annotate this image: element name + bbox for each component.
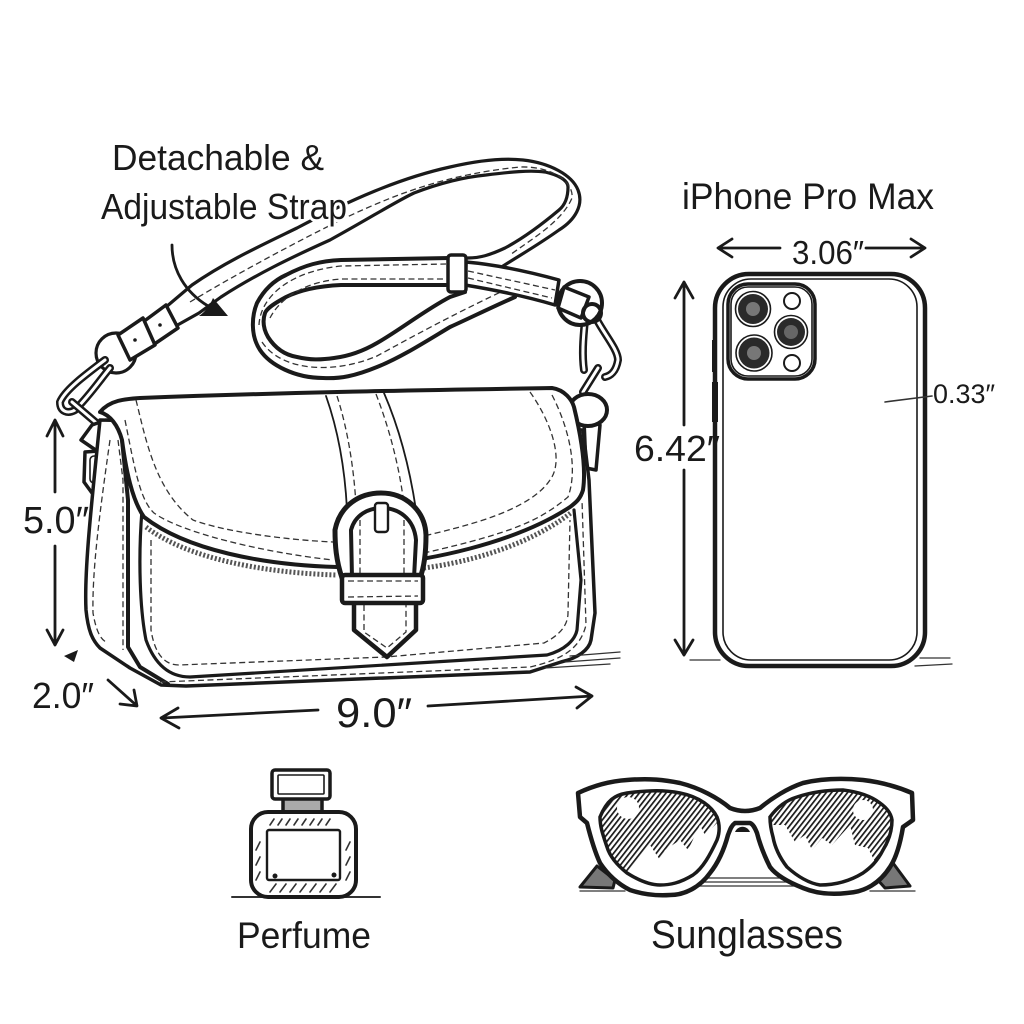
- perfume bottle icon: [232, 770, 380, 897]
- bag depth dimension: [32, 650, 137, 716]
- strap arrow: [172, 245, 228, 316]
- bag width dimension: [161, 687, 592, 736]
- left chain hardware: [60, 333, 136, 493]
- bag width dimension: 9.0″: [336, 689, 412, 736]
- bag depth dimension: 2.0″: [32, 675, 94, 716]
- flap centre strap: [326, 393, 416, 510]
- infographic canvas: [24, 144, 994, 956]
- right strap ring tab: [558, 287, 589, 318]
- bag flap: [100, 388, 584, 567]
- bag height dimension: 5.0″: [23, 500, 89, 542]
- strap: [118, 159, 601, 378]
- phone depth dimension: 0.33″: [933, 379, 995, 409]
- strap label: Adjustable Strap: [101, 186, 347, 227]
- strap label: Detachable &: [112, 137, 324, 178]
- bag height dimension: [23, 420, 89, 645]
- ground shading phone: [690, 658, 952, 666]
- sunglasses label: Sunglasses: [651, 913, 843, 957]
- strap label: [101, 137, 347, 227]
- phone body: [712, 274, 927, 666]
- phone title: iPhone Pro Max: [682, 176, 934, 217]
- phone height dimension: [634, 282, 720, 655]
- phone width dimension: 3.06″: [792, 234, 864, 271]
- right chain hardware: [558, 281, 618, 470]
- phone height dimension: 6.42″: [634, 428, 720, 469]
- camera module: [728, 284, 815, 379]
- bag body: [86, 420, 595, 686]
- sunglasses icon: [578, 779, 915, 895]
- ground shading bag: [545, 652, 620, 668]
- strap keeper: [448, 255, 466, 292]
- flap shadow hatching: [146, 512, 572, 575]
- left buckle: [143, 305, 178, 345]
- buckle and tab: [335, 493, 426, 657]
- phone depth dimension: [885, 379, 995, 409]
- perfume label: Perfume: [237, 915, 371, 956]
- phone width dimension: [718, 234, 925, 271]
